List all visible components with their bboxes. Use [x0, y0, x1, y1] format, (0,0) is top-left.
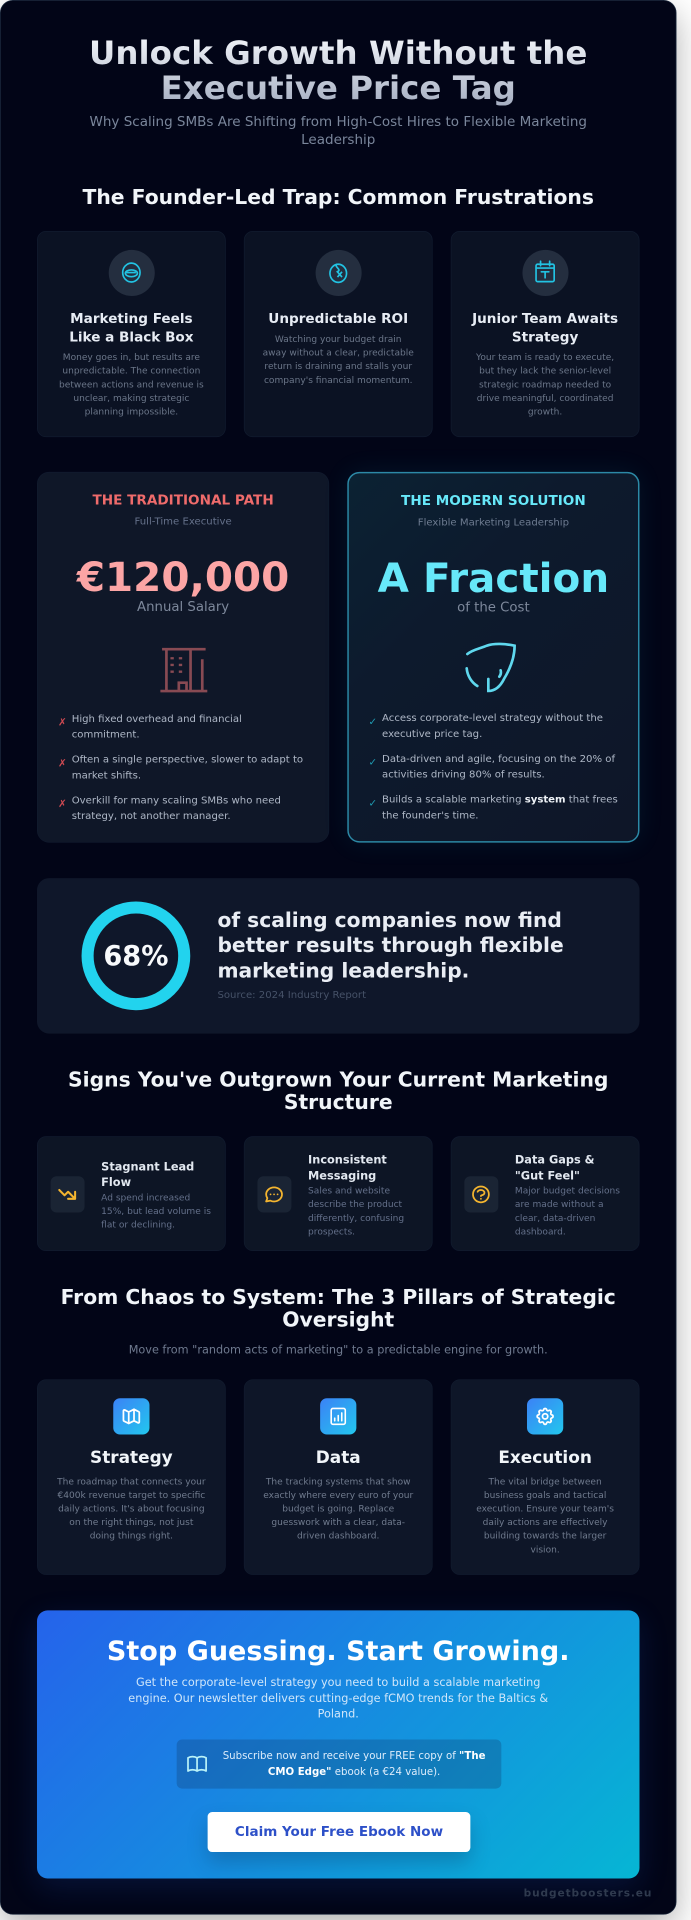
item: activities driving 80% of results.	[382, 769, 545, 781]
panel: traditional path	[37, 472, 329, 843]
item: market shifts.	[72, 770, 141, 781]
item	[382, 794, 618, 821]
stat text: marketing leadership.	[217, 959, 469, 983]
text: on the right things, not just	[69, 1517, 193, 1527]
panel: modern solution	[347, 472, 639, 843]
item: Access corporate-level strategy without the	[382, 713, 603, 724]
item: Builds a scalable marketing system that frees	[382, 794, 618, 806]
text: doing things right.	[90, 1530, 173, 1541]
sublabel: Flexible Marketing Leadership	[418, 517, 569, 528]
title: Messaging	[308, 1169, 376, 1182]
marker: ✓	[368, 797, 377, 809]
card text: but they lack the senior-level	[479, 365, 611, 376]
text: The roadmap that connects your	[57, 1476, 206, 1487]
text: exactly where every euro of your	[263, 1490, 413, 1500]
pillars subtitle: Move from "random acts of marketing" to a predictable engine for growth.	[129, 1343, 548, 1357]
item: the founder's time.	[382, 810, 479, 821]
title: Inconsistent	[308, 1153, 387, 1166]
title: Executive Price Tag	[161, 69, 516, 107]
title	[37, 37, 639, 106]
offer box	[177, 1740, 501, 1789]
source: Source: 2024 Industry Report	[217, 990, 366, 1001]
subtitle	[90, 114, 587, 148]
panel: unpredictable ROI	[244, 231, 433, 437]
icon: elephant	[465, 642, 516, 692]
button: Claim Your Free Ebook Now	[235, 1824, 443, 1840]
text	[476, 1476, 614, 1555]
text	[263, 1476, 414, 1541]
icon: question	[464, 1176, 498, 1213]
item: Data-driven and agile, focusing on the 20% of	[382, 753, 615, 765]
heading: signs	[68, 1068, 608, 1114]
text: budget is going. Replace	[282, 1503, 394, 1514]
card text: strategic roadmap needed to	[479, 379, 611, 390]
card text: planning impossible.	[85, 406, 178, 417]
item: Overkill for many scaling SMBs who need	[72, 795, 281, 806]
sublabel: Full-Time Executive	[134, 516, 232, 528]
label: THE TRADITIONAL PATH	[92, 492, 274, 508]
text: The tracking systems that show	[266, 1476, 411, 1487]
icon: chat bubble	[257, 1176, 291, 1213]
card text: Watching your budget drain	[275, 334, 402, 344]
headline: A Fraction	[378, 554, 609, 602]
heading: signs: Signs You've Outgrown Your Current Marketing	[68, 1068, 608, 1092]
title: "Gut Feel"	[515, 1169, 580, 1182]
card text: between actions and revenue is	[59, 379, 204, 390]
text	[57, 1476, 206, 1541]
price: €120,000	[77, 553, 289, 601]
panel: strategy	[37, 1379, 226, 1575]
text: are made without a	[515, 1199, 604, 1210]
title	[101, 1160, 194, 1189]
card title: Junior Team Awaits	[472, 311, 618, 327]
text: describe the product	[308, 1199, 402, 1210]
text: prospects.	[308, 1226, 355, 1237]
icon: book	[187, 1756, 207, 1772]
title: Stagnant Lead	[101, 1160, 194, 1173]
text: 15%, but lead volume is	[101, 1206, 211, 1216]
marker: ✗	[58, 757, 67, 769]
title: Data Gaps &	[515, 1153, 595, 1166]
panel: black box	[37, 231, 226, 437]
card title	[471, 311, 618, 345]
card text: growth.	[528, 406, 562, 417]
item: executive price tag.	[382, 729, 482, 740]
text: guesswork with a clear, data-	[271, 1517, 405, 1527]
text: vision.	[530, 1544, 560, 1555]
text: daily actions are effectively	[483, 1517, 608, 1527]
icon: gear	[527, 1398, 563, 1434]
text: daily actions. It's about focusing	[58, 1503, 205, 1514]
text	[515, 1185, 620, 1237]
heading: signs: Structure	[284, 1091, 393, 1114]
marker: ✓	[368, 716, 377, 728]
card title: Unpredictable ROI	[268, 311, 408, 327]
title: Data	[316, 1448, 361, 1468]
cta heading: Stop Guessing. Start Growing.	[107, 1636, 570, 1667]
cta text	[128, 1675, 548, 1721]
icon: ROI	[316, 250, 362, 296]
offer text: CMO Edge" ebook (a €24 value).	[268, 1766, 440, 1778]
text: business goals and tactical	[484, 1490, 606, 1500]
item	[382, 713, 603, 740]
card text: drive meaningful, coordinated	[477, 393, 614, 403]
item	[72, 713, 242, 741]
card title	[69, 311, 194, 345]
offer text	[223, 1750, 486, 1778]
title: Execution	[498, 1448, 592, 1468]
text: execution. Ensure your team's	[476, 1503, 614, 1514]
icon: chart	[320, 1398, 356, 1434]
subtitle: Why Scaling SMBs Are Shifting from High-Cost Hires to Flexible Marketing	[90, 114, 587, 130]
card text	[263, 334, 414, 385]
icon: map	[113, 1398, 149, 1434]
text: Major budget decisions	[515, 1185, 620, 1196]
cta text: engine. Our newsletter delivers cutting-edge fCMO trends for the Baltics &	[128, 1691, 548, 1705]
card text: company's financial momentum.	[264, 374, 413, 385]
button	[208, 1812, 470, 1852]
card text: unclear, making strategic	[73, 393, 189, 403]
icon: building	[160, 648, 208, 692]
title: Unlock Growth Without the	[89, 35, 587, 72]
stat text	[217, 909, 564, 983]
item: High fixed overhead and financial	[72, 713, 242, 725]
list: benefits	[368, 713, 618, 821]
text: €400k revenue target to specific	[57, 1490, 205, 1500]
text: clear, data-driven	[515, 1213, 595, 1223]
panel: statistic	[37, 878, 639, 1034]
title: Strategy	[90, 1448, 173, 1468]
marker: ✗	[58, 798, 67, 810]
heading: founder-led trap: The Founder-Led Trap: Common Frustrations	[83, 186, 594, 209]
ring value: 68%	[103, 941, 168, 972]
card text	[59, 352, 204, 417]
panel: data gaps	[451, 1136, 639, 1251]
item: commitment.	[72, 729, 140, 741]
panel: call to action	[37, 1610, 639, 1878]
title: Flow	[101, 1176, 131, 1189]
card title: Marketing Feels	[70, 311, 193, 327]
card text: Money goes in, but results are	[63, 352, 200, 362]
card text: away without a clear, predictable	[263, 347, 414, 358]
item: Often a single perspective, slower to adapt to	[72, 754, 303, 766]
card text: return is draining and stalls your	[264, 361, 412, 371]
item: strategy, not another manager.	[72, 811, 231, 822]
card title: Like a Black Box	[69, 329, 194, 345]
panel: stagnant lead flow	[37, 1136, 226, 1251]
chart: 68 percent ring	[82, 901, 190, 1010]
panel: junior team	[451, 231, 639, 437]
label: THE MODERN SOLUTION	[401, 493, 586, 509]
heading: pillars: From Chaos to System: The 3 Pillars of Strategic	[61, 1286, 616, 1309]
subtitle: Leadership	[301, 132, 375, 148]
text: building towards the larger	[484, 1530, 606, 1541]
title	[515, 1153, 595, 1182]
footer brand: budgetboosters.eu	[524, 1888, 652, 1900]
cta text: Poland.	[318, 1707, 359, 1721]
caption: of the Cost	[457, 600, 530, 615]
offer text: Subscribe now and receive your FREE copy of "The	[223, 1750, 485, 1762]
text	[101, 1192, 211, 1230]
heading: pillars	[61, 1286, 616, 1332]
panel: execution	[451, 1379, 639, 1575]
text: flat or declining.	[101, 1219, 175, 1230]
icon: trending down	[51, 1176, 85, 1213]
price caption: Annual Salary	[137, 599, 229, 615]
text: driven dashboard.	[297, 1530, 379, 1541]
text: The vital bridge between	[488, 1476, 602, 1487]
card text	[476, 352, 614, 417]
marker: ✗	[58, 716, 67, 729]
card text: unpredictable. The connection	[62, 365, 200, 376]
item	[72, 754, 303, 781]
text: Sales and website	[308, 1185, 390, 1196]
panel: data	[244, 1379, 433, 1575]
marker: ✓	[368, 757, 377, 769]
item	[72, 795, 281, 822]
panel: inconsistent messaging	[244, 1136, 433, 1251]
item	[382, 753, 616, 781]
text: Ad spend increased	[101, 1192, 190, 1203]
card title: Strategy	[512, 329, 578, 345]
text: differently, confusing	[308, 1213, 404, 1223]
text: dashboard.	[515, 1226, 566, 1237]
heading: pillars: Oversight	[282, 1308, 394, 1332]
cta text: Get the corporate-level strategy you need to build a scalable marketing	[136, 1675, 540, 1689]
list: downsides	[58, 713, 303, 822]
stat text: of scaling companies now find	[217, 909, 562, 932]
title	[308, 1153, 387, 1182]
icon: black box	[109, 250, 155, 296]
stat text: better results through flexible	[217, 934, 564, 958]
text	[308, 1185, 404, 1237]
icon: calendar	[522, 250, 569, 296]
card text: Your team is ready to execute,	[476, 352, 614, 362]
